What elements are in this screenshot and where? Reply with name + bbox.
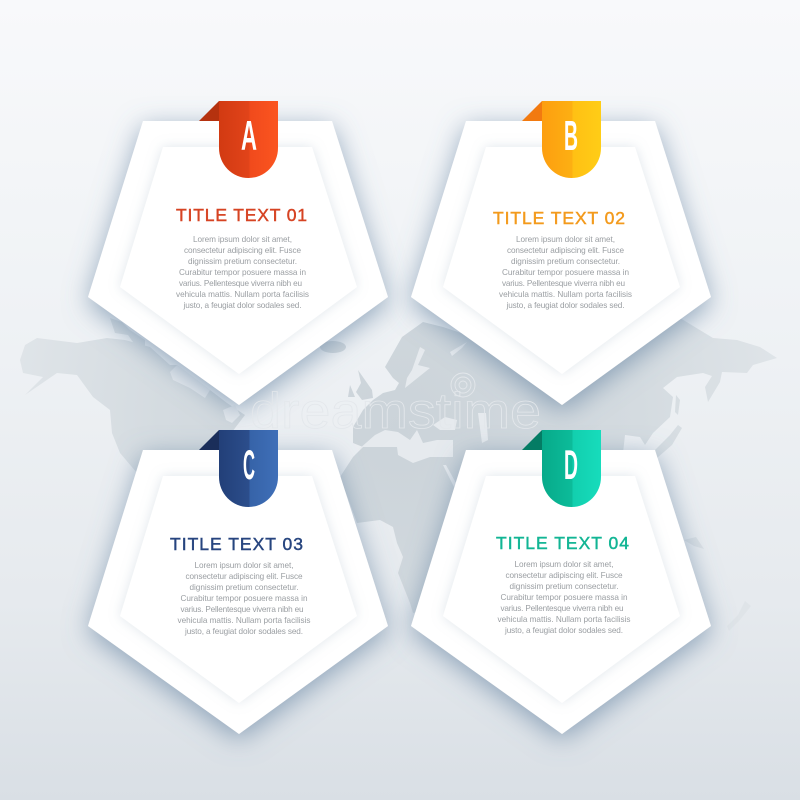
map: Iceland (320, 341, 346, 353)
watermark (250, 373, 541, 439)
card B body text: dignissim pretium consectetur. (511, 257, 620, 266)
card B ribbon: B (564, 112, 578, 159)
water: Mediterranean (358, 430, 453, 463)
map: inland water (170, 342, 488, 487)
watermark spiral (451, 373, 475, 397)
card A body text: consectetur adipiscing elit. Fusce (184, 246, 301, 255)
water: Red Sea (443, 465, 456, 487)
card A body text: justo, a feugiat dolor sodales sed. (182, 301, 302, 310)
card D body text: Curabitur tempor posuere massa in (500, 593, 628, 602)
water: Black Sea (433, 417, 457, 430)
card C inner pentagon (120, 476, 357, 703)
card D title: TITLE TEXT 04 (496, 533, 629, 553)
card B body text: consectetur adipiscing elit. Fusce (507, 246, 624, 255)
panel: card B (411, 101, 711, 405)
card B body text: vehicula mattis. Nullam porta facilisis (499, 290, 632, 299)
panel: card D (411, 430, 711, 734)
map: Sakhalin (675, 395, 680, 415)
card D body text: dignissim pretium consectetur. (510, 582, 618, 591)
card C body text: Curabitur tempor posuere massa in (180, 594, 308, 603)
card C body text (178, 561, 310, 636)
map: New Guinea islands (684, 537, 704, 549)
water: Baltic Sea (405, 347, 430, 388)
map: Japan (655, 425, 682, 458)
card A body text: Curabitur tempor posuere massa in (179, 268, 306, 277)
card B body text: justo, a feugiat dolor sodales sed. (506, 301, 624, 310)
card A body text: dignissim pretium consectetur. (188, 257, 297, 266)
card B body text: Curabitur tempor posuere massa in (502, 268, 629, 277)
card A inner pentagon (120, 147, 357, 374)
card C outer pentagon (88, 450, 388, 734)
card C title: TITLE TEXT 03 (170, 534, 303, 554)
card A body text: vehicula mattis. Nullam porta facilisis (176, 290, 309, 299)
map: North America (20, 338, 245, 520)
card C body text: vehicula mattis. Nullam porta facilisis (178, 616, 310, 625)
letter A: A (241, 112, 257, 159)
card D body text: consectetur adipiscing elit. Fusce (506, 571, 623, 580)
map: Eurasia and Africa (340, 300, 777, 613)
card D outer pentagon (411, 450, 711, 734)
map: Arctic islands (110, 318, 145, 348)
card C body text: dignissim pretium consectetur. (190, 583, 298, 592)
card C body text: consectetur adipiscing elit. Fusce (186, 572, 303, 581)
card D body text: Lorem ipsum dolor sit amet, (514, 560, 614, 569)
card D ribbon: D (564, 441, 578, 488)
card A body text: Lorem ipsum dolor sit amet, (193, 235, 292, 244)
card D body text: vehicula mattis. Nullam porta facilisis (498, 615, 630, 624)
card B ribbon (522, 101, 601, 178)
water: Hudson Bay (170, 365, 210, 398)
card B body text: varius. Pellentesque viverra nibh eu (502, 279, 625, 288)
card A body text (176, 235, 309, 310)
card A body text: varius. Pellentesque viverra nibh eu (179, 279, 302, 288)
water: White Sea (450, 342, 467, 356)
card D inner pentagon (443, 476, 680, 703)
card B outer pentagon (411, 121, 711, 405)
panel: card C (88, 430, 388, 734)
card C body text: varius. Pellentesque viverra nibh eu (180, 605, 304, 614)
card B body text (499, 235, 632, 310)
map: Great Britain (356, 370, 373, 400)
card C ribbon: C (243, 441, 255, 488)
card D body text: varius. Pellentesque viverra nibh eu (500, 604, 624, 613)
card D body text: justo, a feugiat dolor sodales sed. (504, 626, 623, 635)
card B inner pentagon (443, 147, 680, 374)
panel: card A (88, 101, 388, 405)
water: Caspian Sea (478, 413, 488, 443)
card D body text (498, 560, 630, 635)
map: Ireland (348, 385, 355, 397)
card A title: TITLE TEXT 01 (176, 205, 307, 225)
card B title: TITLE TEXT 02 (493, 208, 625, 228)
card C body text: justo, a feugiat dolor sodales sed. (184, 627, 303, 636)
card B body text: Lorem ipsum dolor sit amet, (516, 235, 615, 244)
card A outer pentagon (88, 121, 388, 405)
water: Gulf of St Lawrence (223, 405, 240, 423)
card A ribbon (199, 101, 278, 178)
card C body text: Lorem ipsum dolor sit amet, (194, 561, 294, 570)
card D ribbon (522, 430, 601, 507)
watermark text: dreamstime (250, 383, 541, 439)
card C ribbon (199, 430, 278, 507)
world map (20, 300, 777, 631)
map: New Zealand (727, 601, 751, 631)
